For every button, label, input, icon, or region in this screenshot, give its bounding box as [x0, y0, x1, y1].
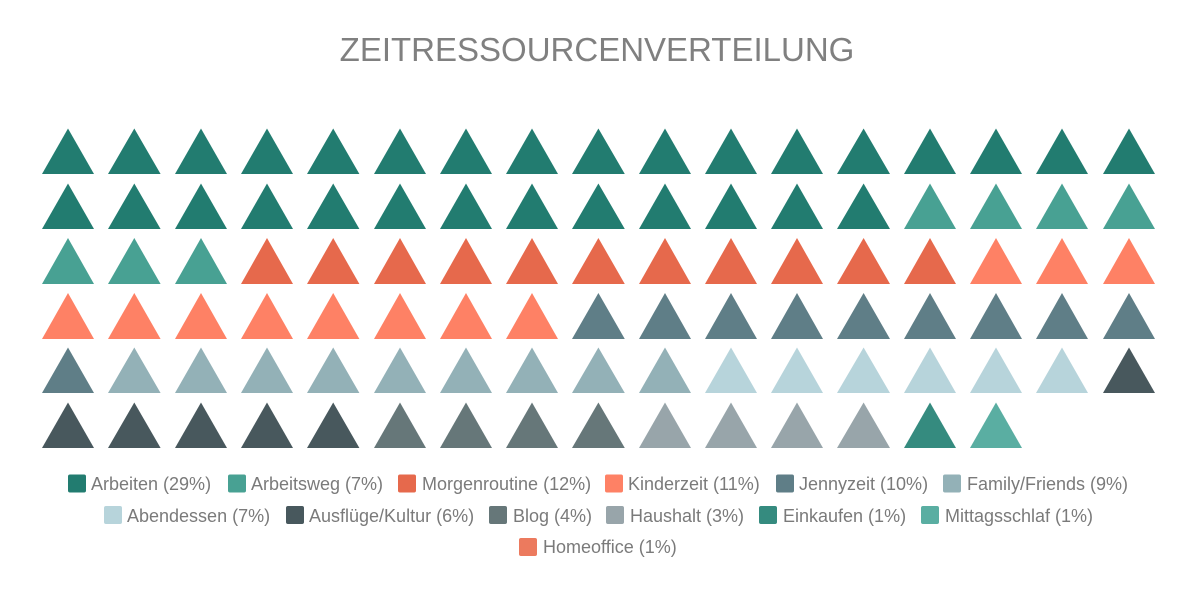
triangles: Haushalt	[639, 402, 890, 448]
legend	[68, 474, 1128, 557]
legend item: Arbeitsweg: Arbeitsweg (7%)	[251, 474, 383, 494]
legend item: Einkaufen: Einkaufen (1%)	[783, 506, 906, 526]
legend item: Mittagsschlaf: Mittagsschlaf (1%)	[945, 506, 1093, 526]
legend item: Arbeiten: Arbeiten (29%)	[91, 474, 211, 494]
triangles: Jennyzeit	[42, 293, 1155, 393]
legend item: Abendessen: Abendessen (7%)	[127, 506, 270, 526]
triangles: Family/Friends	[108, 348, 691, 393]
triangle: Einkaufen	[904, 402, 956, 448]
legend item: Blog: Blog (4%)	[513, 506, 592, 526]
legend item: Haushalt: Haushalt (3%)	[630, 506, 744, 526]
triangles: Morgenroutine	[241, 238, 956, 284]
title: ZEITRESSOURCENVERTEILUNG	[340, 31, 854, 68]
triangles: Arbeiten	[42, 128, 1155, 229]
pictogram chart: triangles	[42, 128, 1155, 448]
triangles: Kinderzeit	[42, 238, 1155, 339]
legend item: Jennyzeit: Jennyzeit (10%)	[799, 474, 928, 494]
triangles: Arbeitsweg	[42, 184, 1155, 284]
triangles: Abendessen	[705, 348, 1088, 393]
legend item: Family/Friends: Family/Friends (9%)	[967, 474, 1128, 494]
legend item: Homeoffice: Homeoffice (1%)	[543, 537, 677, 557]
legend item: Morgenroutine: Morgenroutine (12%)	[422, 474, 591, 494]
legend item: Kinderzeit: Kinderzeit (11%)	[628, 474, 760, 494]
triangles: Blog	[374, 402, 625, 448]
triangles: Ausflüge/Kultur	[42, 348, 1155, 448]
legend item: Ausflüge/Kultur: Ausflüge/Kultur (6%)	[309, 506, 474, 526]
triangle: Mittagsschlaf	[970, 402, 1022, 448]
